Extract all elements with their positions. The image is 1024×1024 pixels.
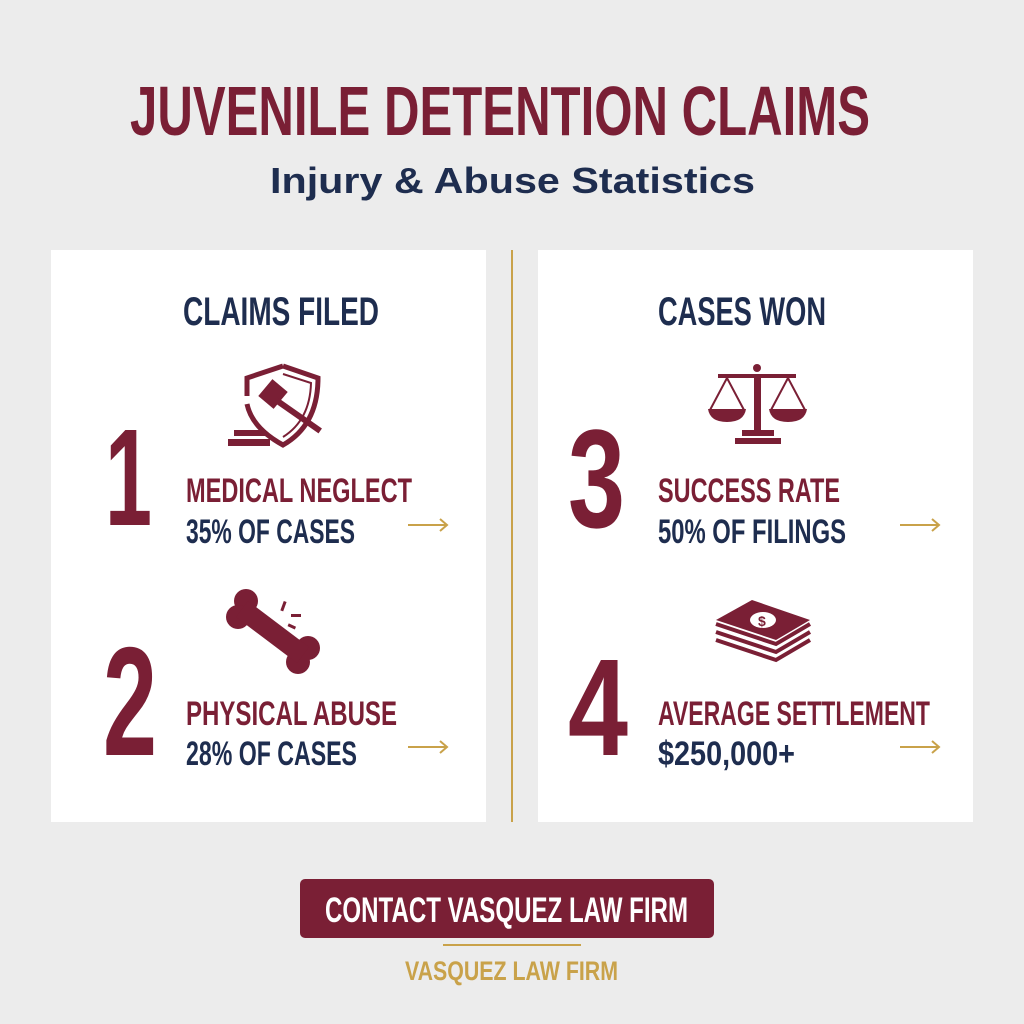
- number 2: 2: [103, 615, 157, 788]
- icon: money stack: $: [758, 613, 766, 629]
- stat: medical neglect: 35% OF CASES: [186, 513, 355, 551]
- stat: medical neglect: [186, 472, 412, 551]
- arrow: [408, 741, 447, 753]
- icon: scales: [708, 364, 807, 444]
- stat: medical neglect: MEDICAL NEGLECT: [186, 472, 412, 510]
- arrow: [900, 741, 939, 753]
- icon: broken bone: [226, 589, 320, 674]
- stat: success rate: SUCCESS RATE: [658, 472, 840, 510]
- button: contact: [300, 879, 714, 938]
- arrow: [900, 519, 939, 531]
- number 3: 3: [568, 400, 625, 557]
- number 4: 4: [568, 631, 628, 785]
- icon: shield gavel: [228, 366, 322, 446]
- stat: physical abuse: PHYSICAL ABUSE: [186, 695, 397, 733]
- stat: physical abuse: [186, 695, 397, 773]
- heading: claims filed: CLAIMS FILED: [183, 290, 379, 334]
- button: contact: CONTACT VASQUEZ LAW FIRM: [325, 891, 688, 930]
- stat: physical abuse: 28% OF CASES: [186, 735, 357, 773]
- icon: money stack: [716, 600, 810, 660]
- arrow: [408, 519, 447, 531]
- number 1: 1: [105, 401, 152, 555]
- footer divider: [443, 944, 581, 946]
- stat: success rate: 50% OF FILINGS: [658, 513, 846, 551]
- stat: success rate: [658, 472, 846, 551]
- heading: cases won: CASES WON: [658, 290, 826, 334]
- footer brand: VASQUEZ LAW FIRM: [405, 956, 618, 986]
- divider: [511, 250, 513, 822]
- panel: claims filed: [51, 250, 486, 822]
- panel: cases won: [538, 250, 973, 822]
- stat: average settlement: $250,000+: [658, 735, 795, 773]
- subtitle: Injury & Abuse Statistics: [270, 160, 755, 201]
- stat: average settlement: [658, 695, 930, 773]
